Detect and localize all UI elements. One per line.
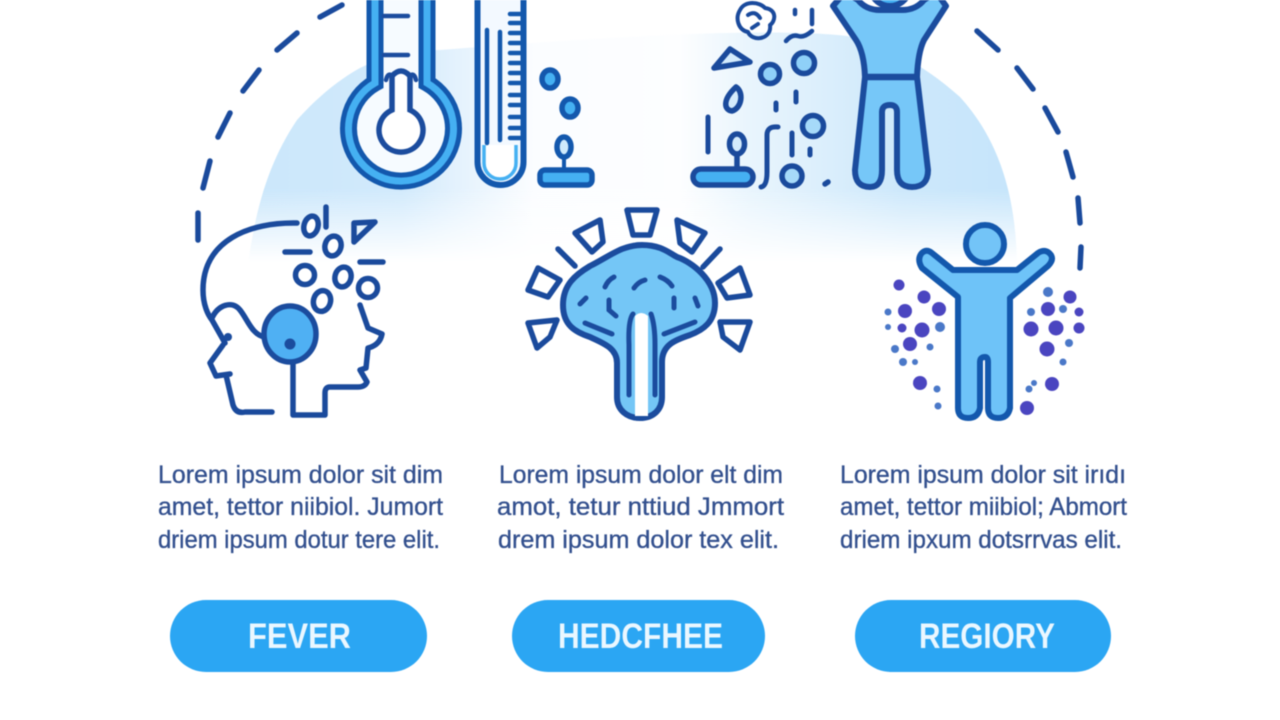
button: recovery: REGIORY [919,617,1055,656]
text block: recovery [840,461,1127,554]
text block: fever: amet, tettor niibiol. Jumort [158,493,443,521]
button: headache: HEDCFHEE [558,617,723,656]
text block: fever: Lorem ipsum dolor sit dim [158,461,443,489]
text block: headache [497,461,784,554]
button: headache [512,600,765,672]
text block: headache: Lorem ipsum dolor elt dim [499,461,783,489]
text block: recovery: Lorem ipsum dolor sit irıdı [840,461,1126,489]
icon: person with dots [884,225,1084,418]
icon: tube thermometer [478,0,524,185]
text block: recovery: amet, tettor miibiol; Abmort [840,493,1127,521]
icon: person with raised arms [833,0,946,187]
button: fever [170,600,427,672]
text block: headache: drem ipsum dolor tex elit. [498,526,779,554]
button: fever: FEVER [248,617,351,656]
icon: droplets on plate [540,70,592,185]
icon: brain [528,210,750,418]
icon: bulb thermometer [348,0,454,181]
button: recovery [855,600,1111,672]
icon: two heads profile [203,207,383,415]
dashed arc [198,5,1081,268]
text block: fever [158,461,443,554]
icon: scattered particles [693,3,828,187]
text block: headache: amot, tetur nttiud Jmmort [497,493,784,521]
text block: fever: driem ipsum dotur tere elit. [158,526,440,554]
background blob [248,33,1017,265]
text block: recovery: driem ipxum dotsrrvas elit. [840,526,1122,554]
